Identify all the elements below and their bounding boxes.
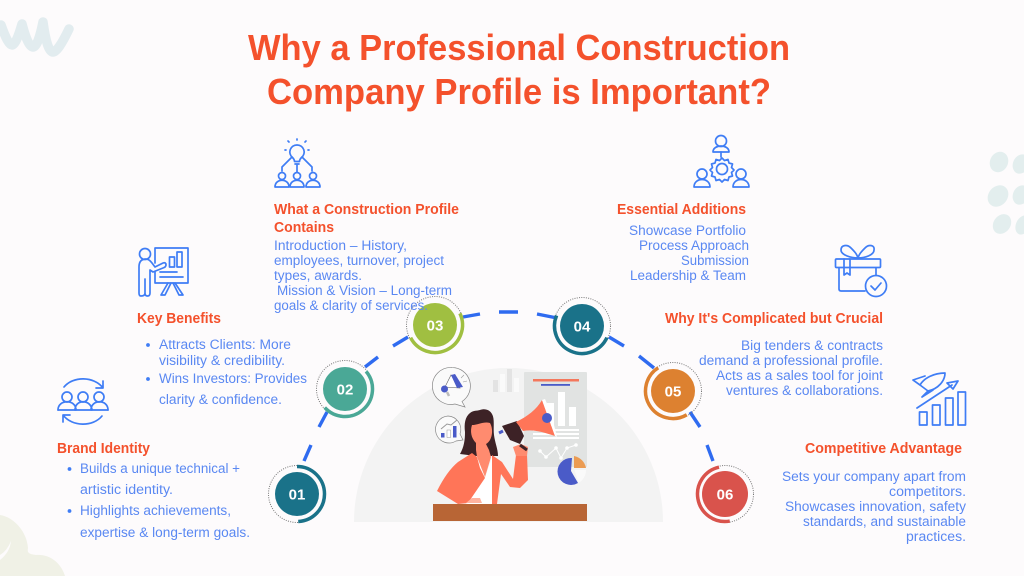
body text — [782, 469, 966, 544]
faint bar graphic — [493, 369, 519, 392]
hair — [460, 409, 498, 456]
step 04 marker: 04 — [574, 318, 591, 336]
step 02 marker — [306, 350, 384, 428]
heading: Key Benefits — [137, 311, 221, 327]
jacket — [437, 453, 528, 504]
heading: Essential Additions — [617, 202, 746, 218]
heading: Contains — [274, 220, 334, 236]
bullet list: Builds a unique technical + — [80, 461, 240, 476]
step 05 marker — [635, 353, 711, 429]
panel: Key Benefits — [137, 248, 307, 407]
white top — [466, 457, 493, 504]
heading: Brand Identity — [57, 441, 150, 457]
body text: goals & clarity of services. — [274, 298, 428, 313]
decoration: blob bottom left — [0, 515, 65, 576]
title — [248, 27, 790, 112]
bullet list: Highlights achievements, — [80, 503, 231, 518]
step 06 marker: 06 — [717, 486, 733, 504]
bullet list — [68, 461, 250, 540]
body text: types, awards. — [274, 268, 362, 283]
step 02 marker: 02 — [337, 382, 353, 398]
body text: Showcases innovation, safety — [785, 499, 966, 514]
central dome — [354, 368, 663, 522]
body text: Big tenders & contracts — [741, 338, 883, 353]
heading: What a Construction Profile — [274, 202, 459, 218]
body text: Sets your company apart from — [782, 469, 966, 484]
panel: Competitive Advantage — [782, 373, 966, 544]
title: Company Profile is Important? — [267, 71, 771, 112]
panel: Essential Additions — [617, 136, 749, 283]
speech bubble: chart — [435, 416, 463, 443]
body text: Leadership & Team — [630, 268, 746, 283]
icon: team with cycle arrows — [58, 379, 108, 424]
bullet list: clarity & confidence. — [159, 392, 282, 407]
icon: rocket and growth chart — [913, 373, 966, 425]
icon: team around gear — [694, 136, 749, 187]
body text: Submission — [681, 253, 749, 268]
step 03 marker — [398, 288, 472, 362]
hand — [513, 444, 528, 456]
body text — [699, 338, 883, 398]
panel: What a Construction Profile Contains — [274, 139, 459, 313]
bullet list: visibility & credibility. — [159, 353, 285, 368]
body text: Mission & Vision – Long-term — [277, 283, 452, 298]
bullet list: Attracts Clients: More — [159, 337, 291, 352]
body text — [629, 223, 749, 283]
body text: demand a professional profile. — [699, 353, 883, 368]
panel: Why It's Complicated but Crucial — [665, 246, 886, 398]
bullet list: expertise & long-term goals. — [80, 525, 250, 540]
step 03 marker: 03 — [427, 318, 443, 334]
bullet list — [146, 337, 307, 407]
decoration: squiggle top left — [1, 22, 69, 52]
speech bubble: megaphone — [432, 367, 470, 407]
step 05 marker: 05 — [665, 384, 681, 400]
report poster — [524, 372, 587, 467]
heading — [274, 202, 459, 236]
body text: Introduction – History, — [274, 238, 407, 253]
body text: standards, and sustainable — [803, 514, 966, 529]
bullet list: Wins Investors: Provides — [159, 371, 307, 386]
neck and face — [471, 422, 492, 477]
icon: gift with check — [836, 246, 886, 296]
icon: bulb with team — [275, 139, 320, 187]
body text: Showcase Portfolio — [629, 223, 746, 238]
body text: employees, turnover, project — [274, 253, 444, 268]
body text: Acts as a sales tool for joint — [716, 368, 883, 383]
panel: Brand Identity — [57, 379, 250, 540]
bullet list: artistic identity. — [80, 482, 173, 497]
megaphone — [499, 399, 557, 450]
decoration: dots right — [983, 149, 1024, 237]
heading: Why It's Complicated but Crucial — [665, 311, 883, 327]
body text: Process Approach — [639, 238, 749, 253]
step 01 marker: 01 — [289, 486, 305, 504]
title: Why a Professional Construction — [248, 27, 790, 68]
desk — [433, 504, 587, 521]
dashed arc connector — [304, 312, 713, 461]
body text: competitors. — [889, 484, 966, 499]
pie chart — [557, 456, 586, 485]
step 06 marker — [693, 462, 757, 526]
heading: Competitive Advantage — [805, 441, 962, 457]
icon: presenter at board — [139, 248, 188, 296]
step 01 marker — [268, 466, 326, 522]
step 04 marker — [545, 289, 619, 363]
body text: practices. — [906, 529, 966, 544]
illustration: woman with megaphone — [432, 367, 587, 521]
body text — [274, 238, 452, 313]
body text: ventures & collaborations. — [726, 383, 883, 398]
